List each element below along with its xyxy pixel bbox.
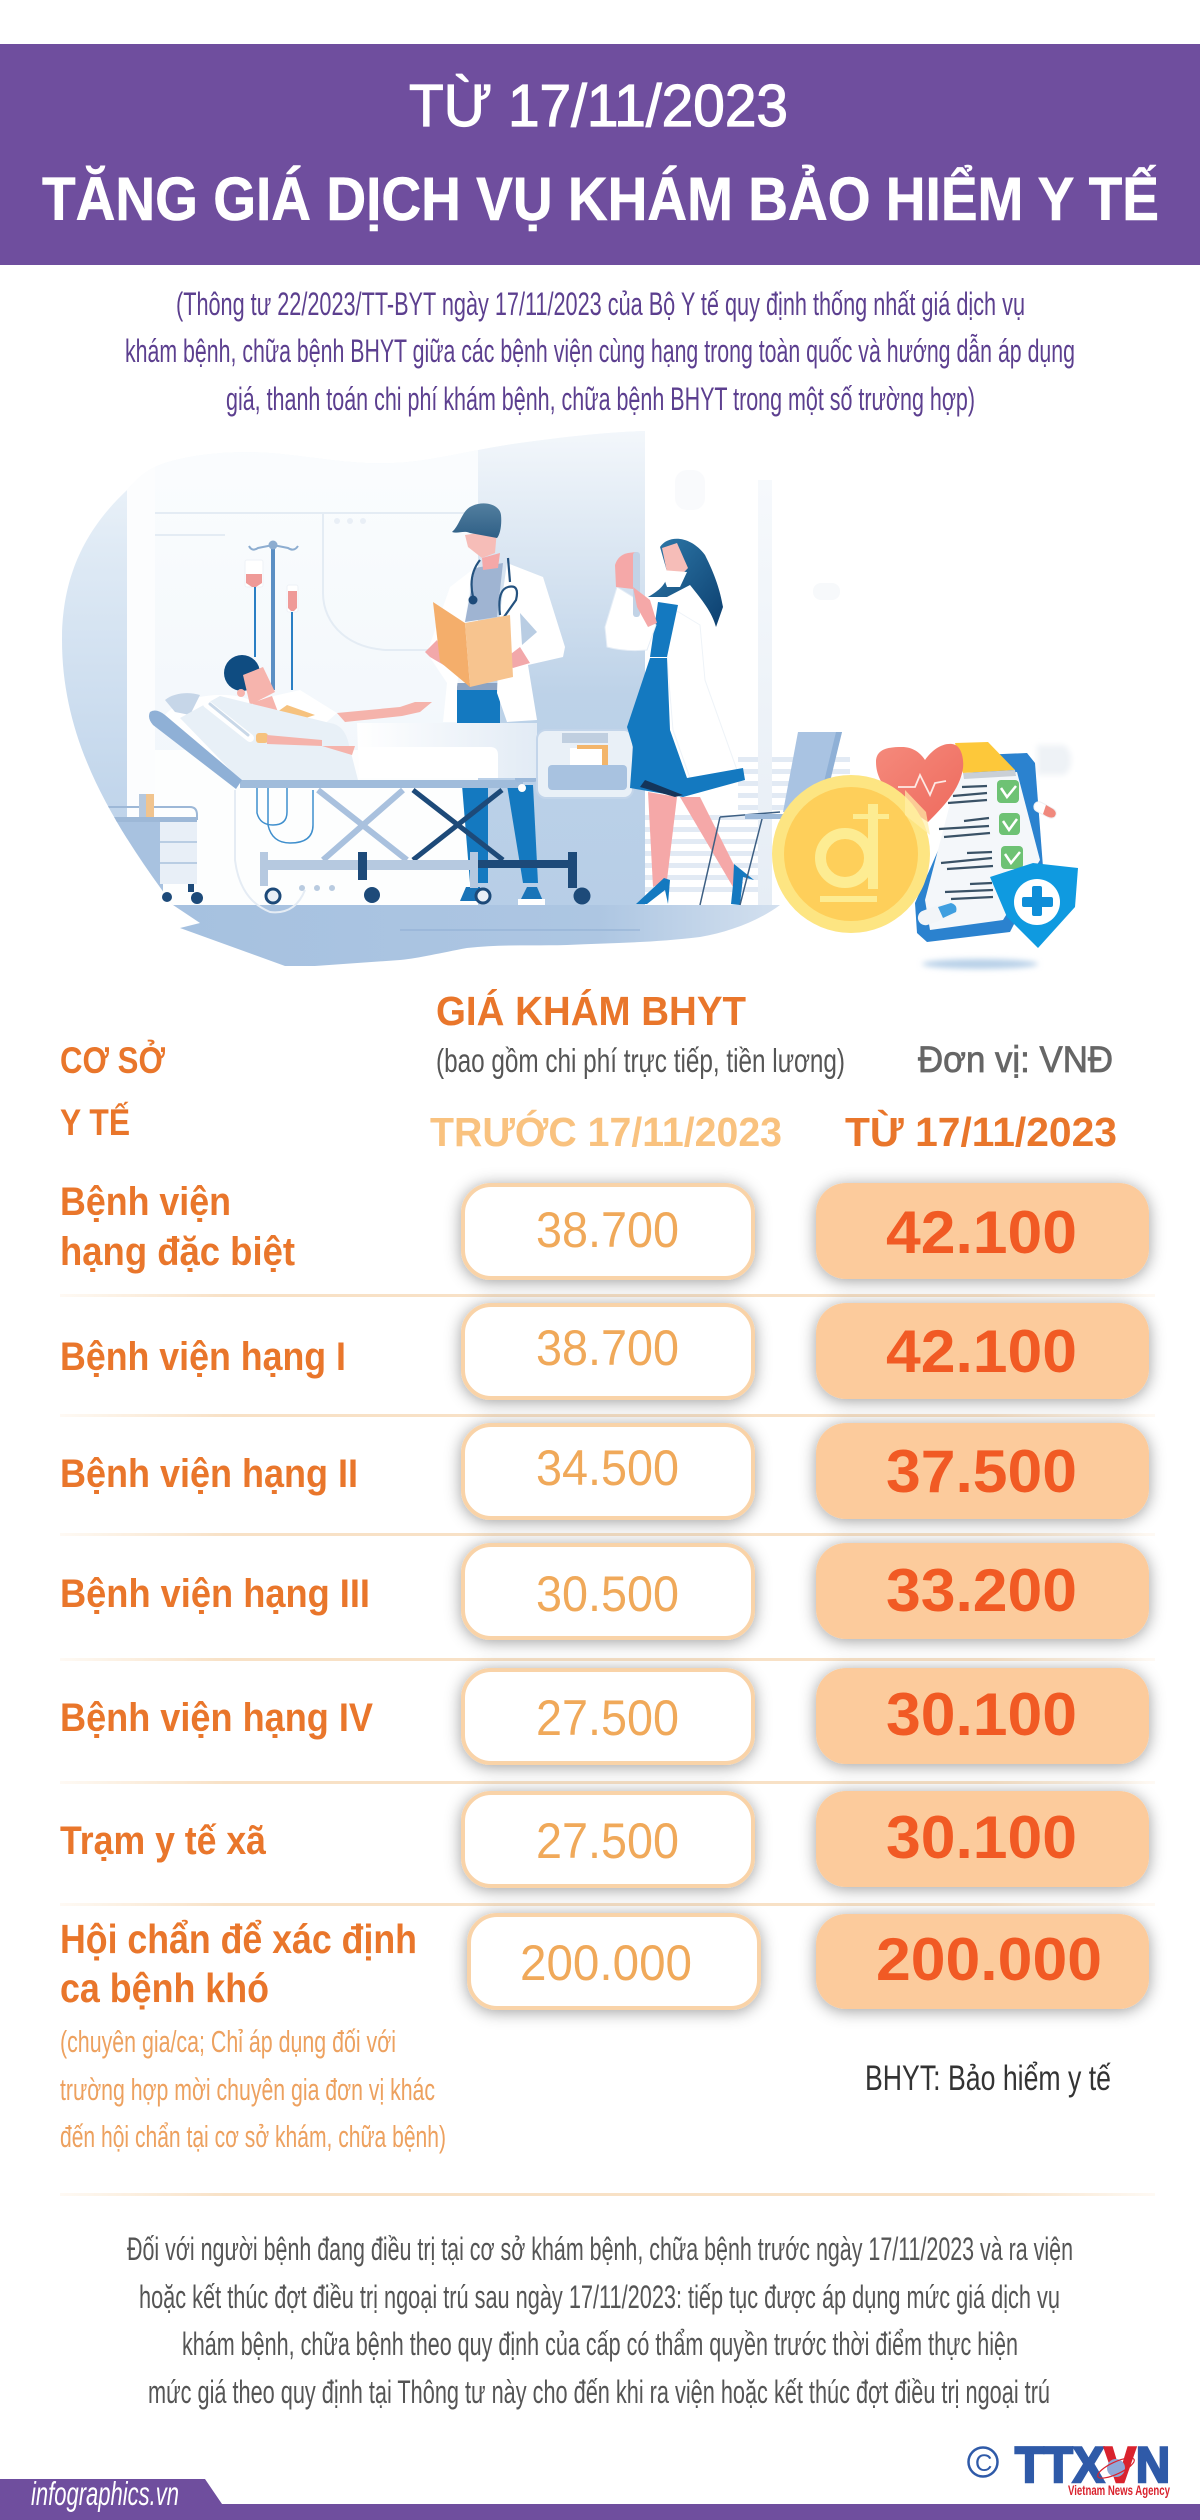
row: class III: 33.200 [886,1557,1077,1624]
coin with dong sign [772,775,930,933]
row: special class hospital: Bệnh viện [60,1180,231,1224]
shield with cross [990,863,1078,948]
row: class IV: 30.100 [886,1681,1077,1748]
row: class III [60,1543,1149,1639]
row: commune health station: 30.100 [886,1804,1077,1871]
row: commune health station: Trạm y tế xã [60,1819,267,1863]
bed frame [235,770,590,912]
row: class I [60,1303,1149,1399]
title line 1: TỪ 17/11/2023 [409,73,788,139]
from heading: TỪ 17/11/2023 [845,1109,1117,1155]
row: class II: 34.500 [536,1440,679,1496]
row: class II: 37.500 [886,1438,1077,1505]
abbreviation note: BHYT: Bảo hiểm y tế [865,2059,1111,2098]
row: special class hospital: 38.700 [536,1202,679,1258]
row dividers [60,1294,1155,2196]
floor [173,905,780,966]
row: special class hospital [60,1180,1149,1279]
hospital illustration [62,431,1078,969]
row: commune health station [60,1791,1149,1887]
row: special class hospital: hạng đặc biệt [60,1230,295,1274]
row: class IV: 27.500 [536,1690,679,1746]
before heading: TRƯỚC 17/11/2023 [430,1109,782,1155]
consultation note: (chuyên gia/ca; Chỉ áp dụng đối với [60,2024,396,2059]
intro text [125,286,1075,417]
row: class IV [60,1668,1149,1764]
header band [0,44,1200,265]
doctor coat and upper body [427,503,565,726]
row: consultation [60,1914,1149,2154]
bed and patient [149,655,537,789]
footer band [0,2475,1200,2520]
consultation note: đến hội chẩn tại cơ sở khám, chữa bệnh) [60,2119,446,2154]
bedside unit [537,730,633,798]
consultation note [60,2024,446,2154]
footer band: infographics.vn [31,2475,179,2512]
row: class II: Bệnh viện hạng II [60,1452,358,1496]
price note: (bao gồm chi phí trực tiếp, tiền lương) [436,1042,845,1079]
medicine cart [108,794,198,892]
TTXVN logo: TTXVN [1015,2437,1170,2493]
column heading: facility [60,1039,165,1143]
row: consultation: ca bệnh khó [60,1965,269,2011]
consultation note: trường hợp mời chuyên gia đơn vị khác [60,2072,435,2107]
column heading: facility: Y TẾ [60,1102,130,1143]
table headings [60,988,1117,1155]
row: consultation: 200.000 [520,1935,692,1991]
nurse [605,539,754,905]
row: consultation: 200.000 [876,1926,1102,1993]
heart icon [876,744,963,822]
row: class IV: Bệnh viện hạng IV [60,1696,373,1740]
window and blinds [645,470,850,905]
row: class III: 30.500 [536,1566,679,1622]
unit: Đơn vị: VNĐ [918,1039,1113,1080]
row: class III: Bệnh viện hạng III [60,1572,370,1616]
row: class I: 38.700 [536,1320,679,1376]
column heading: price: GIÁ KHÁM BHYT [436,988,746,1034]
doctor folder [425,602,530,687]
bottom note [127,2231,1073,2410]
row: special class hospital: 42.100 [886,1199,1077,1266]
row: consultation: Hội chẩn để xác định [60,1916,417,1962]
row: class I: 42.100 [886,1318,1077,1385]
TTXVN logo: C [975,2450,992,2477]
IV stand [245,540,298,690]
chair [700,732,842,905]
cart wheels [162,884,203,904]
row: class II [60,1423,1149,1519]
room background [62,431,645,911]
row: class I: Bệnh viện hạng I [60,1335,346,1379]
row: commune health station: 27.500 [536,1813,679,1869]
ground shadow [922,959,1038,969]
clipboard [915,742,1071,942]
doctor legs [460,785,545,905]
column heading: facility: CƠ SỞ [60,1039,165,1081]
